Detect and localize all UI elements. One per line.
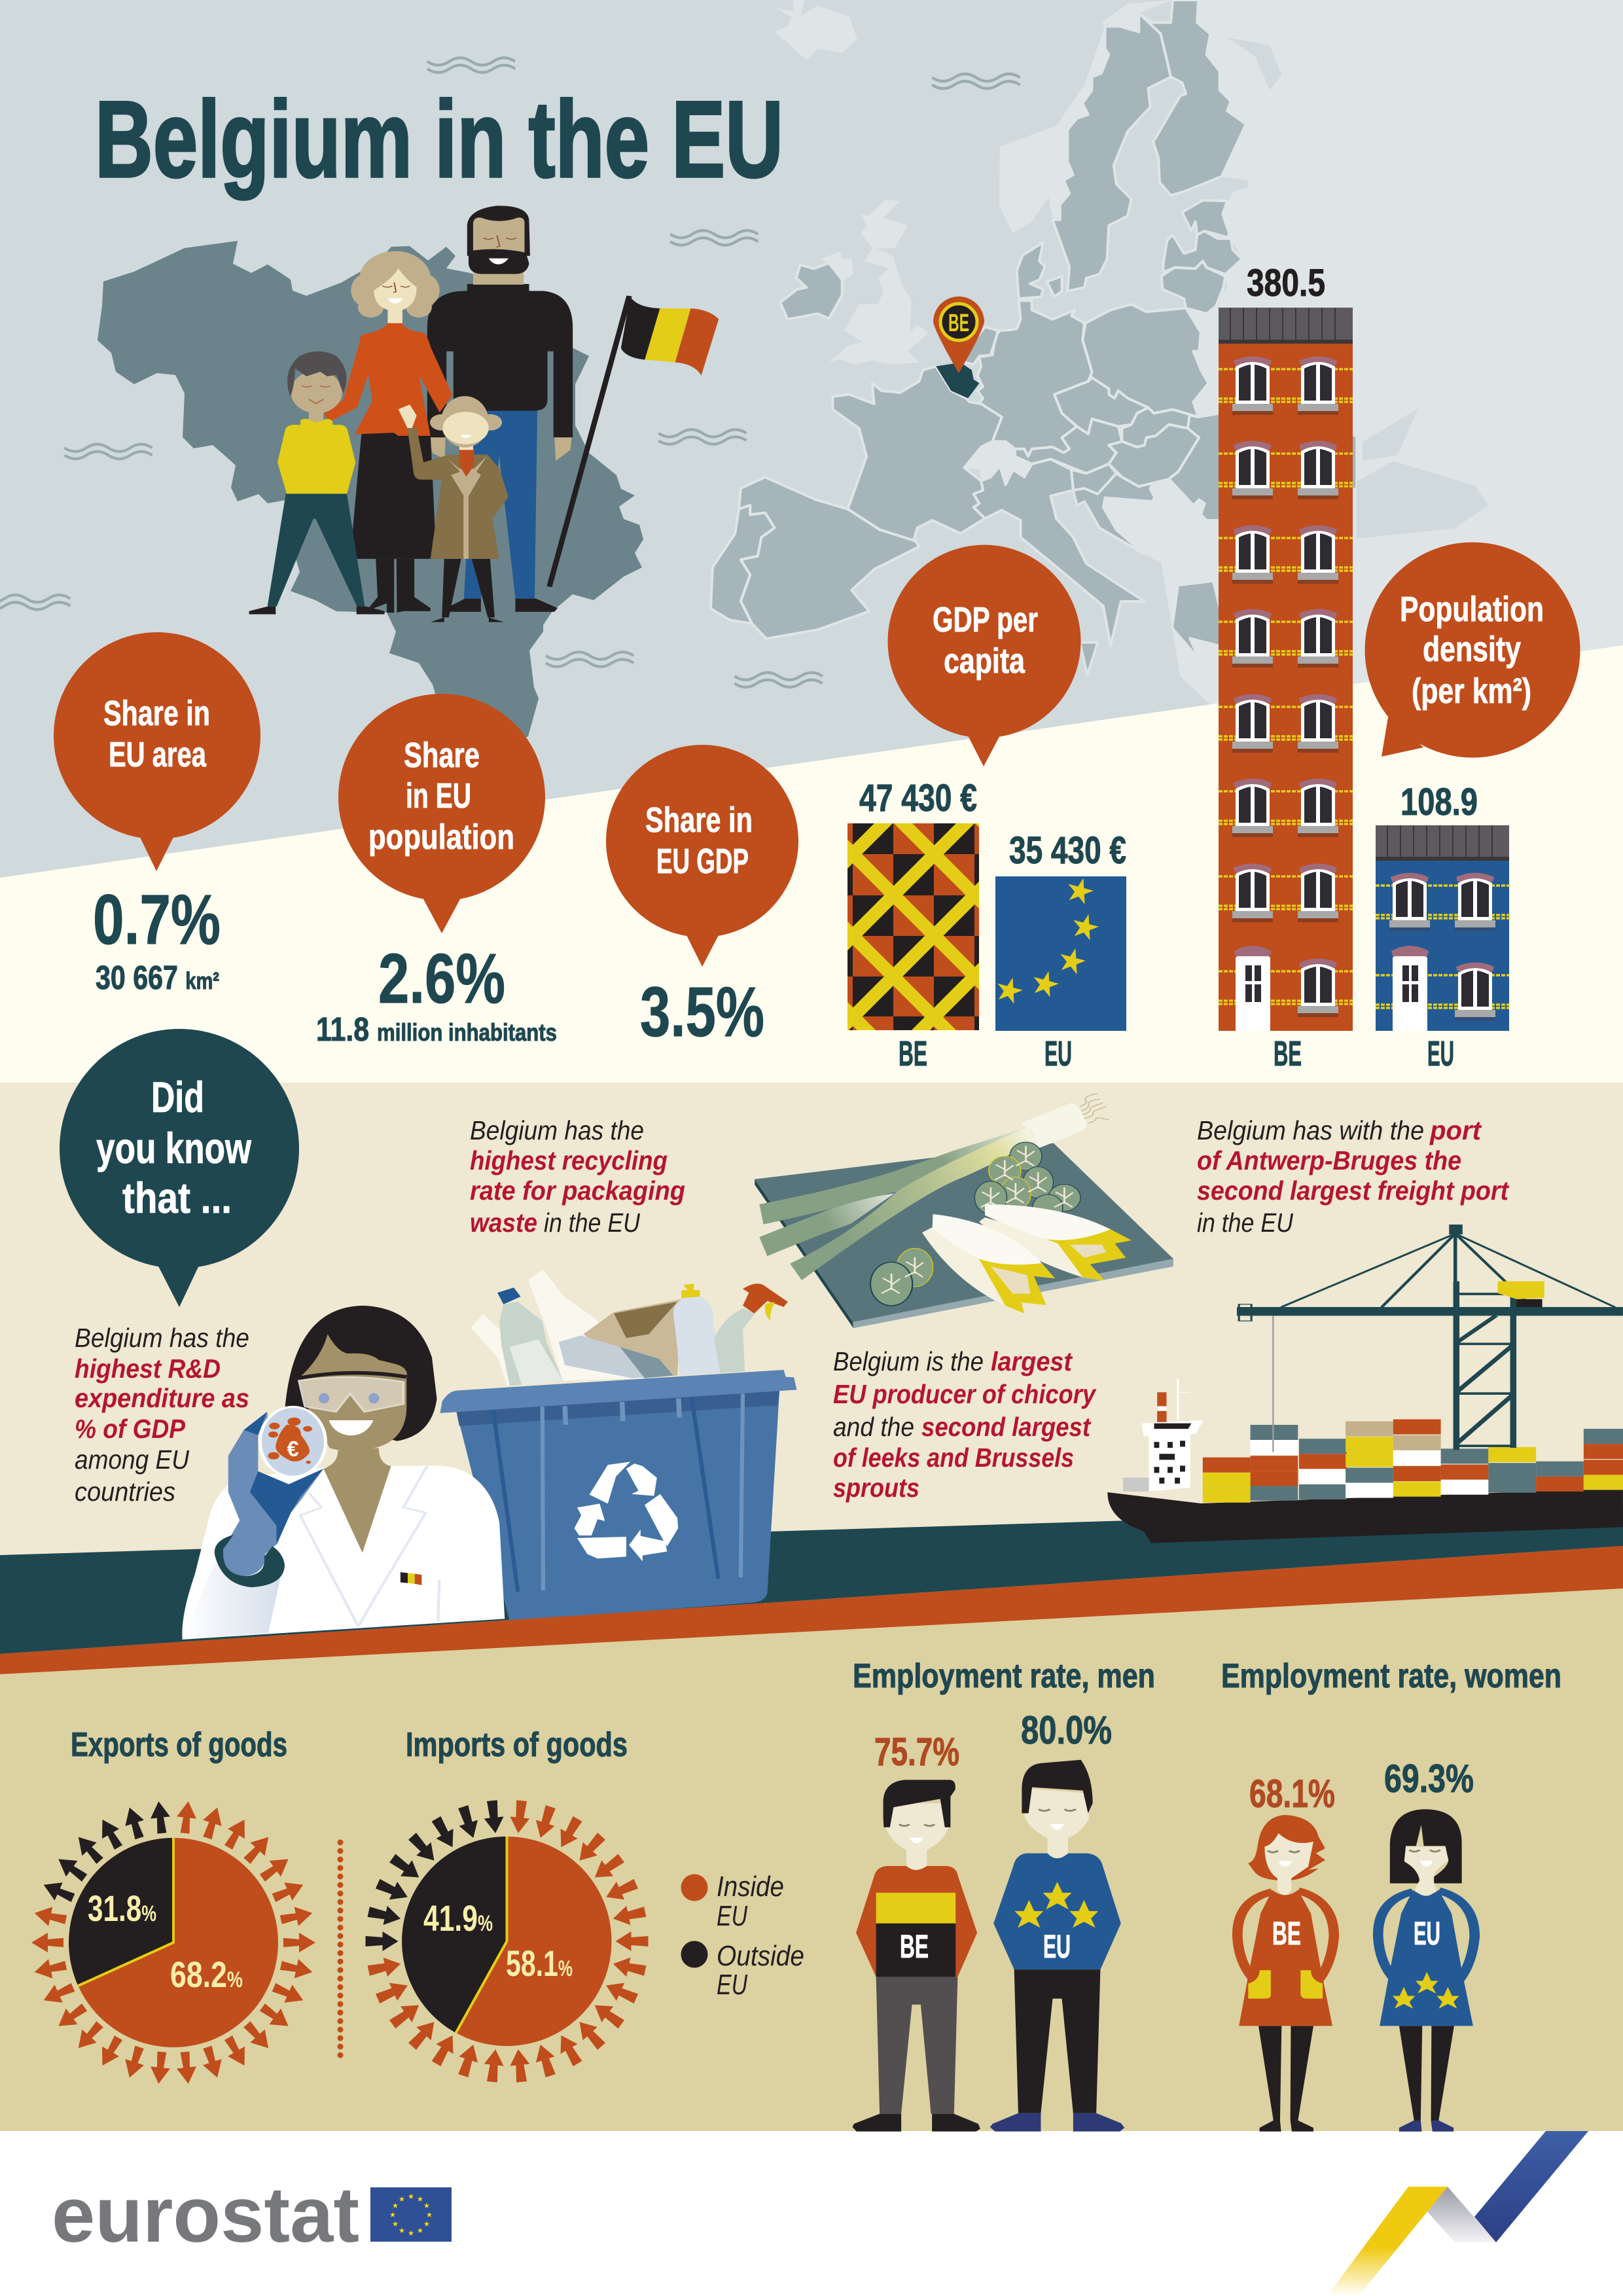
bar: GDP per capita EU xyxy=(993,829,1126,1073)
heading: employment rate, women: Employment rate, women xyxy=(1221,1657,1561,1695)
text: chicory fact: sprouts xyxy=(833,1473,919,1503)
icon: recycling symbol xyxy=(575,1462,678,1562)
text: R&D fact: expenditure as xyxy=(75,1383,249,1413)
beige did-you-know panel xyxy=(0,1083,1623,1737)
text: R&D fact xyxy=(75,1323,249,1507)
bubble: share in EU GDP: Share in xyxy=(645,800,753,840)
illustration: container ship xyxy=(1107,1378,1623,1543)
petri dish with euro xyxy=(260,1407,326,1477)
text: R&D fact: highest R&D xyxy=(75,1354,221,1384)
bubble: share in EU GDP xyxy=(606,745,798,967)
figure: women BE xyxy=(1238,1772,1335,2132)
map: Black Sea, Greece and Sicily xyxy=(1080,408,1488,675)
legend: EU xyxy=(717,1900,747,1932)
illustration: vegetables on a board xyxy=(755,1094,1173,1328)
bubble: share in EU population xyxy=(338,694,545,933)
superstructure xyxy=(1123,1378,1204,1492)
illustration: port crane xyxy=(1237,1225,1623,1452)
man xyxy=(427,206,573,612)
lab coat xyxy=(182,1465,505,1640)
illustration: blue recycling bin with waste xyxy=(440,1270,797,1621)
bubble: share in EU population: population xyxy=(368,817,514,857)
tan statistics panel xyxy=(0,1588,1623,2131)
figure: men BE xyxy=(853,1730,980,2132)
location pin: BE xyxy=(933,296,984,398)
legend xyxy=(681,1871,804,2001)
building: population density EU: 108.9 xyxy=(1400,781,1478,823)
building: population density EU xyxy=(1376,781,1510,1073)
chart: exports of goods xyxy=(31,1726,315,2085)
footer: ribbon logo xyxy=(1327,2131,1588,2296)
bar: GDP per capita BE xyxy=(847,784,979,1066)
bubble: population density: density xyxy=(1423,630,1521,669)
text: chicory fact: and the xyxy=(833,1412,914,1442)
building: population density BE: 380.5 xyxy=(1247,262,1325,304)
stat: 0.7%: 30 667 km² xyxy=(96,959,219,996)
chicory xyxy=(922,1227,1005,1306)
did you know bubble: Did xyxy=(151,1073,204,1121)
text: chicory fact: second largest xyxy=(921,1412,1092,1442)
text: R&D fact: % of GDP xyxy=(75,1414,186,1444)
boy xyxy=(249,351,385,615)
building: population density BE: BE xyxy=(1274,1034,1302,1073)
cream background panel xyxy=(0,645,1623,1086)
figure: women EU: 69.3% xyxy=(1384,1757,1474,1801)
building: population density BE xyxy=(1219,262,1353,1073)
big map of Belgium xyxy=(98,241,643,772)
location pin: BE: BE xyxy=(948,310,969,337)
text: chicory fact: largest xyxy=(991,1346,1073,1376)
bubble: population density: Population xyxy=(1400,590,1544,629)
girl xyxy=(399,396,508,622)
heading: employment rate, men: Employment rate, men xyxy=(853,1657,1155,1695)
text: R&D fact: Belgium has the xyxy=(75,1323,249,1353)
text: chicory fact: Belgium is the xyxy=(833,1346,984,1376)
bar: GDP per capita BE: 47 430 € xyxy=(859,777,977,819)
figure: women EU: EU xyxy=(1414,1915,1440,1952)
text: chicory fact: EU producer of chicory xyxy=(833,1379,1097,1409)
bar: GDP per capita EU: 35 430 € xyxy=(1009,829,1126,872)
text: recycling fact: waste xyxy=(470,1208,537,1238)
legend: Outside xyxy=(717,1940,804,1972)
stat: 0.7% xyxy=(93,880,221,996)
bubble: GDP per capita: GDP per xyxy=(933,600,1038,639)
text: port fact xyxy=(1197,1115,1510,1238)
chart: exports of goods: 68.2% xyxy=(170,1954,243,1995)
text: recycling fact xyxy=(470,1115,685,1238)
text: port fact: in the EU xyxy=(1197,1208,1293,1238)
sprouts xyxy=(870,1142,1080,1306)
chart: imports of goods: 41.9% xyxy=(423,1897,493,1939)
text: recycling fact: in the EU xyxy=(544,1208,640,1238)
chart: exports of goods: 31.8% xyxy=(88,1888,156,1929)
footer: eurostat logo: eurostat xyxy=(52,2171,359,2259)
hull xyxy=(1107,1488,1623,1543)
illustration: family with flag xyxy=(249,206,719,622)
stat: 3.5%: 3.5% xyxy=(640,972,764,1051)
did you know bubble: that ... xyxy=(122,1174,232,1222)
teal ground band xyxy=(0,1505,1623,1654)
text: chicory fact: of leeks and Brussels xyxy=(833,1443,1074,1473)
text: R&D fact: countries xyxy=(75,1477,175,1507)
figure: men BE: BE xyxy=(900,1928,929,1965)
orange diagonal band xyxy=(0,1546,1623,1674)
chart: imports of goods: Imports of goods xyxy=(406,1726,628,1764)
chart: exports of goods: Exports of goods xyxy=(71,1726,287,1764)
did you know bubble xyxy=(60,1029,299,1307)
text: port fact: Belgium has with the xyxy=(1197,1115,1424,1145)
figure: women BE: 68.1% xyxy=(1249,1772,1335,1816)
waste items xyxy=(471,1270,788,1386)
bubble: share in EU GDP: EU GDP xyxy=(656,842,749,881)
bubble: population density: (per km²) xyxy=(1412,672,1531,711)
flag of Belgium xyxy=(549,296,719,586)
bubble: share in EU area: Share in xyxy=(103,694,210,733)
text: port fact: second largest freight port xyxy=(1197,1175,1510,1206)
bubble: GDP per capita: capita xyxy=(944,641,1026,681)
bar: GDP per capita BE: BE xyxy=(899,1034,927,1073)
bubble: share in EU population: in EU xyxy=(406,776,471,816)
figure: women EU xyxy=(1378,1757,1474,2132)
figure: men BE: 75.7% xyxy=(874,1730,959,1774)
stat: 2.6%: 11.8 million inhabitants xyxy=(316,1011,557,1048)
illustration: scientist with petri dish xyxy=(182,1306,505,1640)
chart: imports of goods: 58.1% xyxy=(506,1943,573,1984)
bubble: share in EU population: Share xyxy=(404,736,480,775)
petri dish with euro: € xyxy=(287,1437,299,1461)
bar: GDP per capita EU: EU xyxy=(1044,1034,1072,1073)
stat: 2.6%: 2.6% xyxy=(378,939,505,1018)
text: port fact: port xyxy=(1429,1115,1482,1145)
bubble: share in EU area xyxy=(54,632,260,871)
bubble: population density xyxy=(1365,542,1580,758)
containers xyxy=(1203,1420,1623,1503)
text: chicory fact xyxy=(833,1346,1097,1503)
text: recycling fact: Belgium has the xyxy=(470,1115,644,1145)
legend: Inside xyxy=(717,1871,784,1903)
wave decorations xyxy=(0,58,1020,687)
text: port fact: of Antwerp-Bruges the xyxy=(1197,1145,1461,1175)
did you know bubble: you know xyxy=(96,1124,252,1172)
woman xyxy=(324,251,452,613)
stat: 0.7%: 0.7% xyxy=(93,880,221,959)
text: R&D fact: among EU xyxy=(75,1444,189,1475)
building: population density EU: EU xyxy=(1427,1034,1454,1073)
figure: men EU xyxy=(990,1708,1124,2132)
bubble: GDP per capita xyxy=(887,545,1081,766)
map of Europe xyxy=(711,0,1623,714)
chart: imports of goods xyxy=(365,1726,648,2083)
text: recycling fact: rate for packaging xyxy=(470,1175,685,1206)
glove xyxy=(223,1412,323,1576)
figure: men EU: 80.0% xyxy=(1021,1708,1112,1752)
bubble: share in EU area: EU area xyxy=(109,735,207,774)
dotted divider xyxy=(338,1842,343,2058)
figure: men EU: EU xyxy=(1043,1928,1071,1965)
legend: EU xyxy=(717,1969,747,2001)
figure: women BE: BE xyxy=(1272,1915,1301,1952)
stat: 2.6% xyxy=(316,939,557,1048)
title: Belgium in the EU xyxy=(95,79,783,200)
text: recycling fact: highest recycling xyxy=(470,1145,668,1175)
